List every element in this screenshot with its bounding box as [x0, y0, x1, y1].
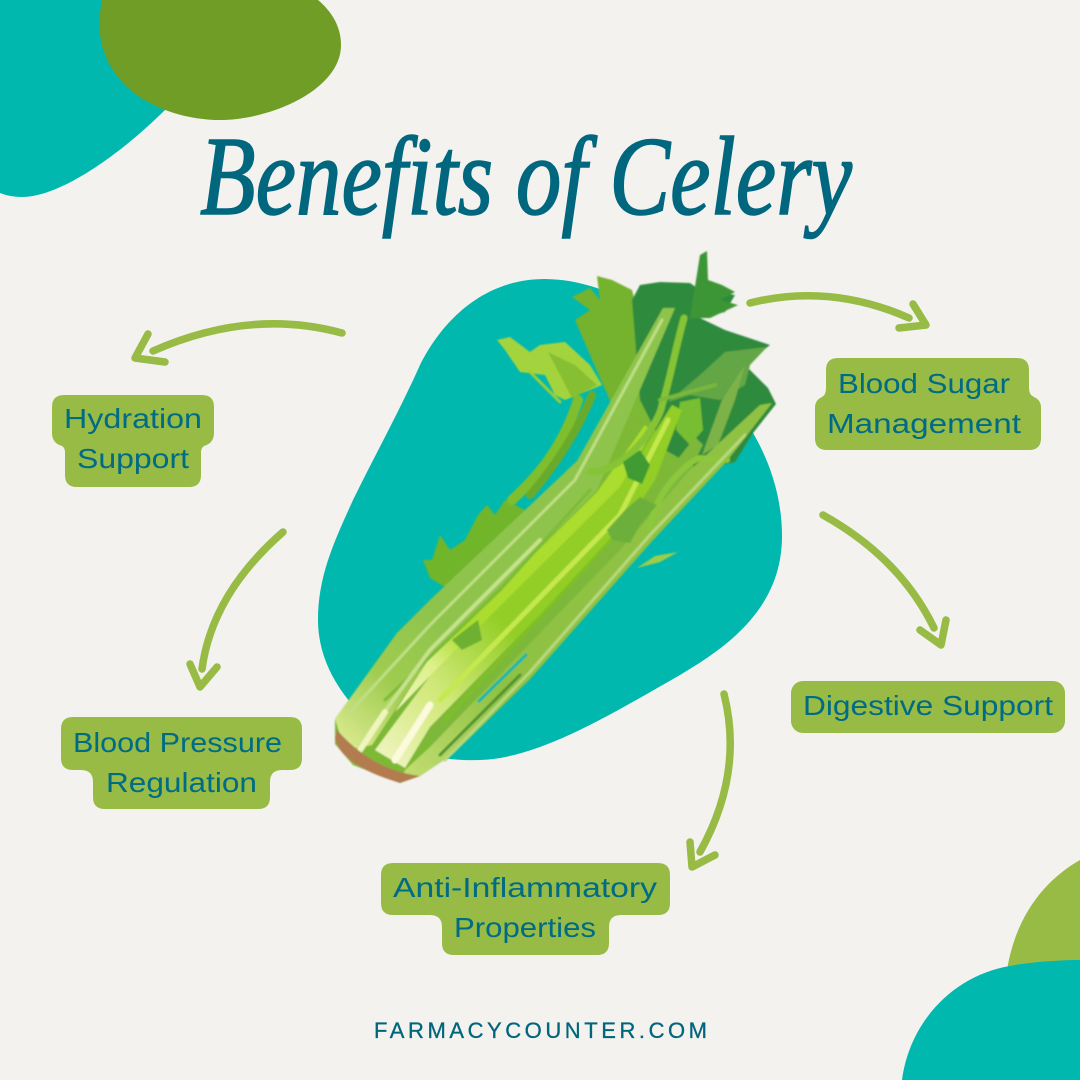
celery: cross stems	[590, 318, 727, 528]
celery: back leaves dark	[632, 282, 776, 470]
label: blood sugar management	[815, 358, 1041, 450]
label: digestive support: Digestive Support	[803, 690, 1053, 721]
celery: left thin stems	[512, 372, 592, 500]
blob: top-left green	[100, 0, 341, 120]
celery: stalk upper big	[335, 308, 675, 750]
celery: left leaf inner shade	[548, 352, 597, 398]
celery: stalk middle big	[375, 405, 682, 768]
label: blood pressure regulation: Regulation	[106, 767, 257, 798]
label: blood sugar management: Management	[827, 408, 1021, 439]
label: anti-inflammatory properties: Anti-Inflammatory	[393, 872, 657, 903]
label: hydration support: Hydration	[64, 403, 202, 434]
celery: stalk bottom	[400, 403, 772, 783]
celery: bright inner leaf	[676, 398, 703, 445]
celery: brown root end	[335, 730, 420, 783]
celery: top tip leaf	[690, 251, 738, 318]
arrow: to hydration	[135, 324, 342, 362]
label: blood pressure regulation	[61, 717, 302, 809]
label: digestive support	[791, 681, 1065, 733]
label: hydration support: Support	[77, 443, 189, 474]
celery: upper yellow-green leaves	[572, 276, 650, 405]
footer website: FARMACYCOUNTER.COM	[374, 1018, 707, 1043]
arrow: to anti-inflammatory	[690, 694, 730, 867]
celery: small leaf cluster	[607, 497, 657, 543]
celery: right vertical leaf stem	[702, 365, 745, 455]
blob: center teal	[318, 279, 782, 760]
celery: small leaf on stalk	[452, 620, 482, 650]
blob: bottom-right teal	[902, 960, 1080, 1080]
celery: teal slit	[478, 654, 527, 702]
label: hydration support	[52, 395, 214, 487]
blob: bottom-right green	[1007, 860, 1080, 970]
arrow: to blood pressure	[190, 532, 283, 687]
arrow: to digestive	[823, 515, 946, 645]
arrow: to blood sugar	[750, 296, 926, 328]
celery: stalk streaks	[350, 320, 745, 760]
celery: lower-left leaflets	[423, 500, 525, 590]
celery: small middle leaf	[623, 450, 650, 484]
celery: stalk thin bright	[395, 425, 652, 712]
celery: stalk underlay	[335, 380, 772, 783]
label: blood sugar management: Blood Sugar	[838, 368, 1010, 399]
celery: small bright leaf	[637, 552, 678, 568]
blob: top-left teal	[0, 0, 180, 197]
celery illustration	[335, 251, 776, 783]
title: Benefits of Celery	[200, 115, 852, 239]
label: anti-inflammatory properties: Properties	[454, 912, 596, 943]
label: anti-inflammatory properties	[381, 863, 670, 955]
celery: left pale leaves	[497, 337, 602, 400]
celery: right pale leaf	[668, 347, 767, 402]
celery: stalk back	[430, 437, 703, 747]
label: blood pressure regulation: Blood Pressure	[73, 727, 282, 758]
